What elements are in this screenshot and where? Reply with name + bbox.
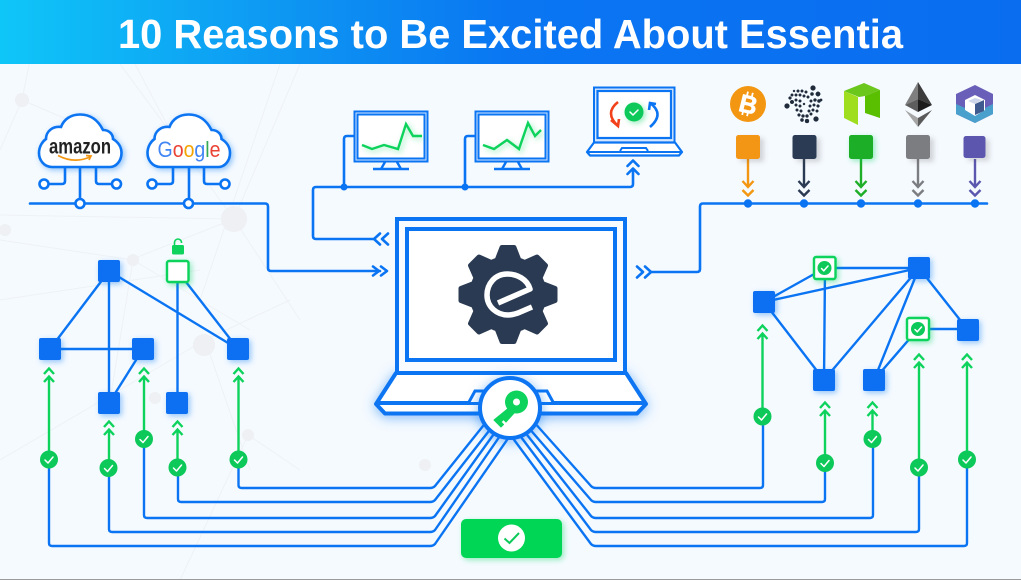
cloud: google [148, 114, 230, 208]
coin connector: orange [736, 135, 760, 196]
connection lines from key to right nodes [512, 416, 967, 546]
check badge [624, 102, 644, 122]
coin icon: cube hexagon [956, 85, 993, 123]
monitor network lines [313, 136, 638, 244]
coin connector: grey [906, 135, 930, 196]
right node network links [764, 268, 968, 380]
key icon [494, 390, 528, 427]
right nodes [753, 257, 979, 391]
monitor 1 [354, 112, 428, 169]
small laptop with sync icon [587, 88, 682, 156]
left check badges [40, 430, 248, 477]
laptop screen [397, 219, 625, 373]
coin icon: iota [785, 86, 822, 123]
trackpad notch [469, 391, 553, 402]
monitor 2 [476, 112, 548, 169]
coin icon: neo [844, 83, 880, 125]
connection lines from key to left nodes [49, 421, 509, 546]
coin icon: bitcoin [730, 86, 766, 122]
title banner [0, 0, 1021, 64]
bottom edge [0, 579, 1021, 580]
coin connector: navy [792, 135, 816, 196]
right check badges [754, 408, 976, 476]
coin connector: purple [964, 136, 986, 196]
title: 10 Reasons to Be Excited About Essentia [118, 11, 904, 57]
amazon logo: amazon [49, 136, 111, 158]
laptop base [376, 373, 646, 414]
coin connector: green [849, 135, 873, 196]
google logo: Google [158, 137, 220, 162]
main laptop [376, 219, 646, 438]
right verification arrows [758, 326, 972, 467]
cloud: amazon [39, 114, 122, 208]
coin bus line [637, 199, 987, 278]
key badge [480, 378, 540, 438]
coin icon: bitcoin: B [736, 89, 760, 121]
cloud provider bus line to laptop [30, 204, 387, 276]
left node network links [50, 271, 238, 403]
coin icon: ethereum [905, 82, 932, 127]
verified button [461, 519, 562, 558]
open padlock icon [172, 239, 184, 254]
left nodes [39, 260, 249, 414]
chart line [483, 123, 541, 149]
essentia gear logo [461, 248, 555, 342]
blue arrow [649, 103, 658, 127]
red arrow [611, 102, 619, 126]
left verification arrows [44, 368, 244, 468]
chart line [362, 124, 422, 149]
